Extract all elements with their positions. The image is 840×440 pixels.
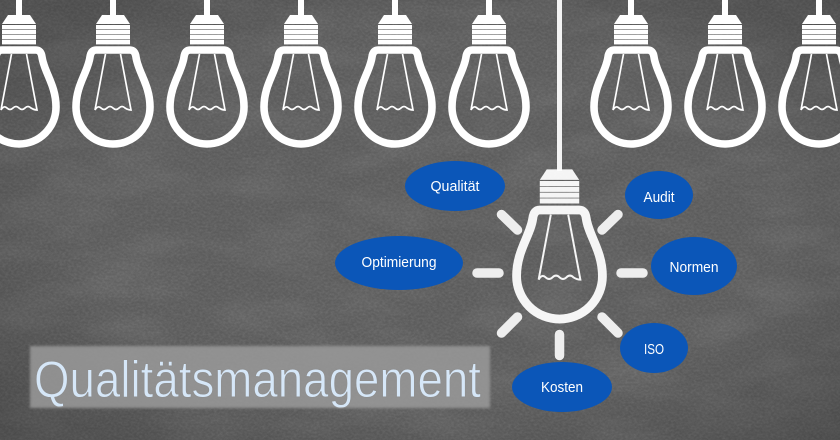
bubble: Qualität [405, 161, 505, 211]
bubble: Audit [625, 171, 693, 219]
bubble: Qualität: Qualität [430, 178, 480, 195]
bubble: ISO [620, 323, 688, 373]
row of hanging light bulbs [0, 0, 840, 144]
bubble: Audit: Audit [644, 189, 675, 206]
central cord [557, 0, 562, 171]
bubble: Optimierung [335, 236, 463, 290]
bubble: Kosten: Kosten [541, 379, 583, 396]
central light bulb [517, 169, 602, 319]
bubble: Normen: Normen [670, 259, 718, 276]
bubble: ISO: ISO [644, 341, 664, 358]
bubble: Kosten [512, 362, 612, 412]
bubble: Optimierung: Optimierung [362, 254, 436, 271]
light rays around central bulb [477, 214, 643, 356]
bubble: Normen [651, 237, 737, 295]
title: Qualitätsmanagement [34, 351, 481, 409]
